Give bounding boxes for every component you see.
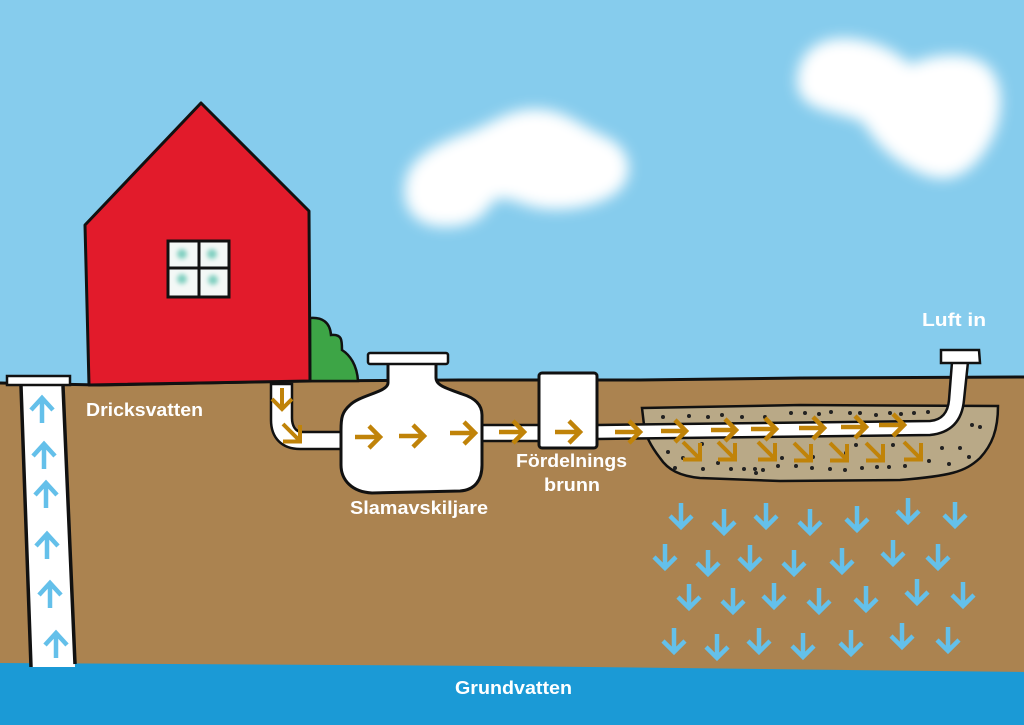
label: Luft in: Luft in — [922, 310, 986, 330]
pipe to distribution well — [478, 425, 541, 441]
tank cap — [368, 353, 448, 364]
label: brunn: brunn — [544, 475, 600, 495]
gravel bed — [642, 405, 998, 481]
ground line — [0, 377, 1024, 385]
house body — [85, 103, 310, 385]
inlet pipe — [271, 384, 345, 449]
label: Grundvatten: Grundvatten — [455, 678, 572, 698]
distribution pipe and vent — [597, 350, 980, 439]
sky background — [0, 0, 1024, 400]
window — [168, 241, 229, 297]
well arrows — [31, 398, 67, 658]
label: Slamavskiljare: Slamavskiljare — [350, 498, 488, 518]
vent cap — [941, 350, 980, 363]
well shaft — [21, 386, 75, 667]
pipe — [597, 362, 968, 439]
well walls — [21, 386, 75, 667]
blue infiltration arrows — [654, 498, 974, 658]
house — [85, 103, 310, 385]
brown flow arrows — [272, 388, 921, 460]
ground — [0, 377, 1024, 725]
drinking water well — [7, 376, 75, 667]
label: Fördelnings: Fördelnings — [516, 451, 627, 471]
cloud: middle — [407, 112, 626, 224]
groundwater — [0, 663, 1024, 725]
drain field — [642, 405, 998, 481]
septic tank — [341, 353, 482, 493]
cloud: right — [800, 41, 997, 176]
distribution well — [539, 373, 597, 448]
bush — [310, 318, 358, 381]
well cap — [7, 376, 70, 385]
tank body — [341, 363, 482, 493]
label: Dricksvatten: Dricksvatten — [86, 400, 203, 420]
gravel stones — [661, 410, 982, 475]
